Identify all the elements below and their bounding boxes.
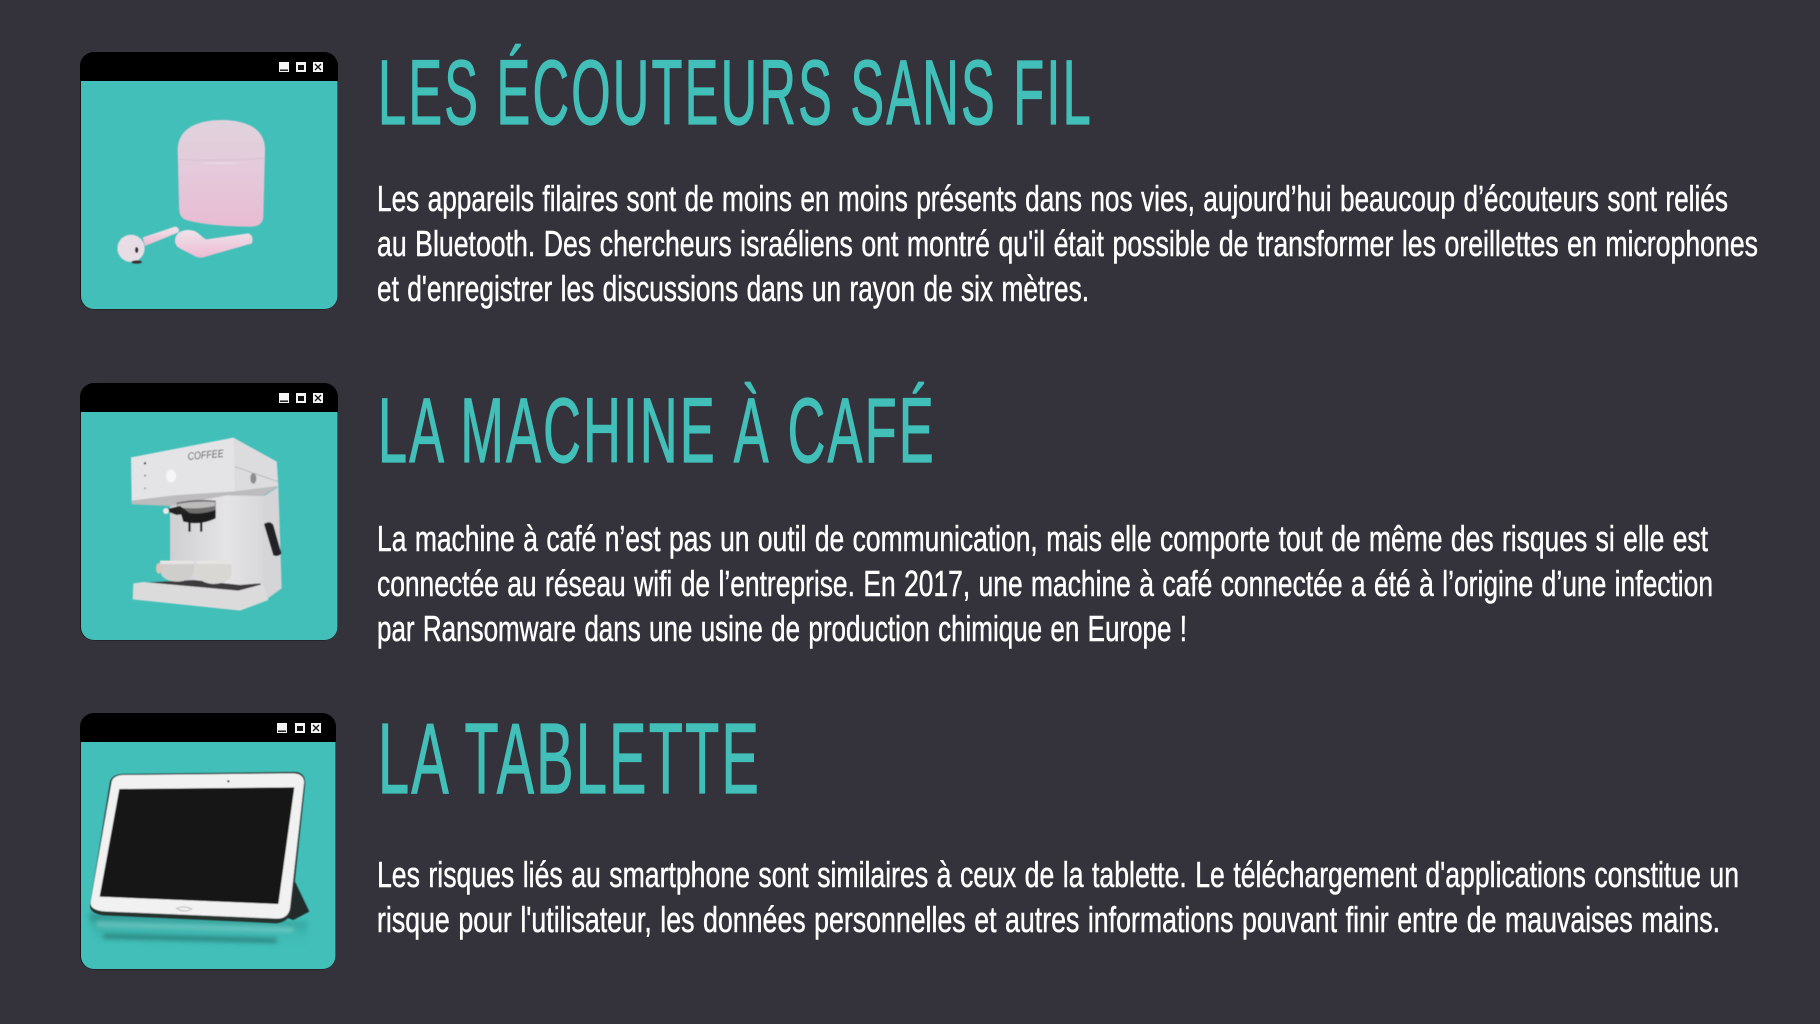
text block: coffee machine description: [377, 518, 1713, 649]
panel: coffee machine window: [80, 383, 338, 640]
icon: coffee machine illustration: COFFEE: [187, 448, 225, 463]
icon: coffee machine illustration: [131, 438, 282, 611]
text block: tablet description: [377, 854, 1739, 940]
icon: earbuds illustration: [117, 120, 265, 264]
icon: window buttons: [279, 62, 323, 72]
panel: wireless earbuds window: [80, 52, 338, 310]
text block: earbuds description: [377, 178, 1758, 309]
panel: tablet window: [80, 713, 336, 970]
title: la tablette: LA TABLETTE: [378, 703, 761, 815]
icon: tablet illustration: [88, 772, 309, 947]
title: la machine à café: LA MACHINE À CAFÉ: [378, 380, 936, 482]
title: les écouteurs sans fil: LES ÉCOUTEURS SANS FIL: [378, 42, 1093, 144]
icon: window buttons: [279, 393, 323, 403]
text block: earbuds description: et d'enregistrer les discussions dans un rayon de six mètres.: [377, 268, 1089, 309]
text block: coffee machine description: par Ransomware dans une usine de production chimique en Europe !: [377, 608, 1187, 649]
icon: window buttons: [277, 723, 321, 733]
